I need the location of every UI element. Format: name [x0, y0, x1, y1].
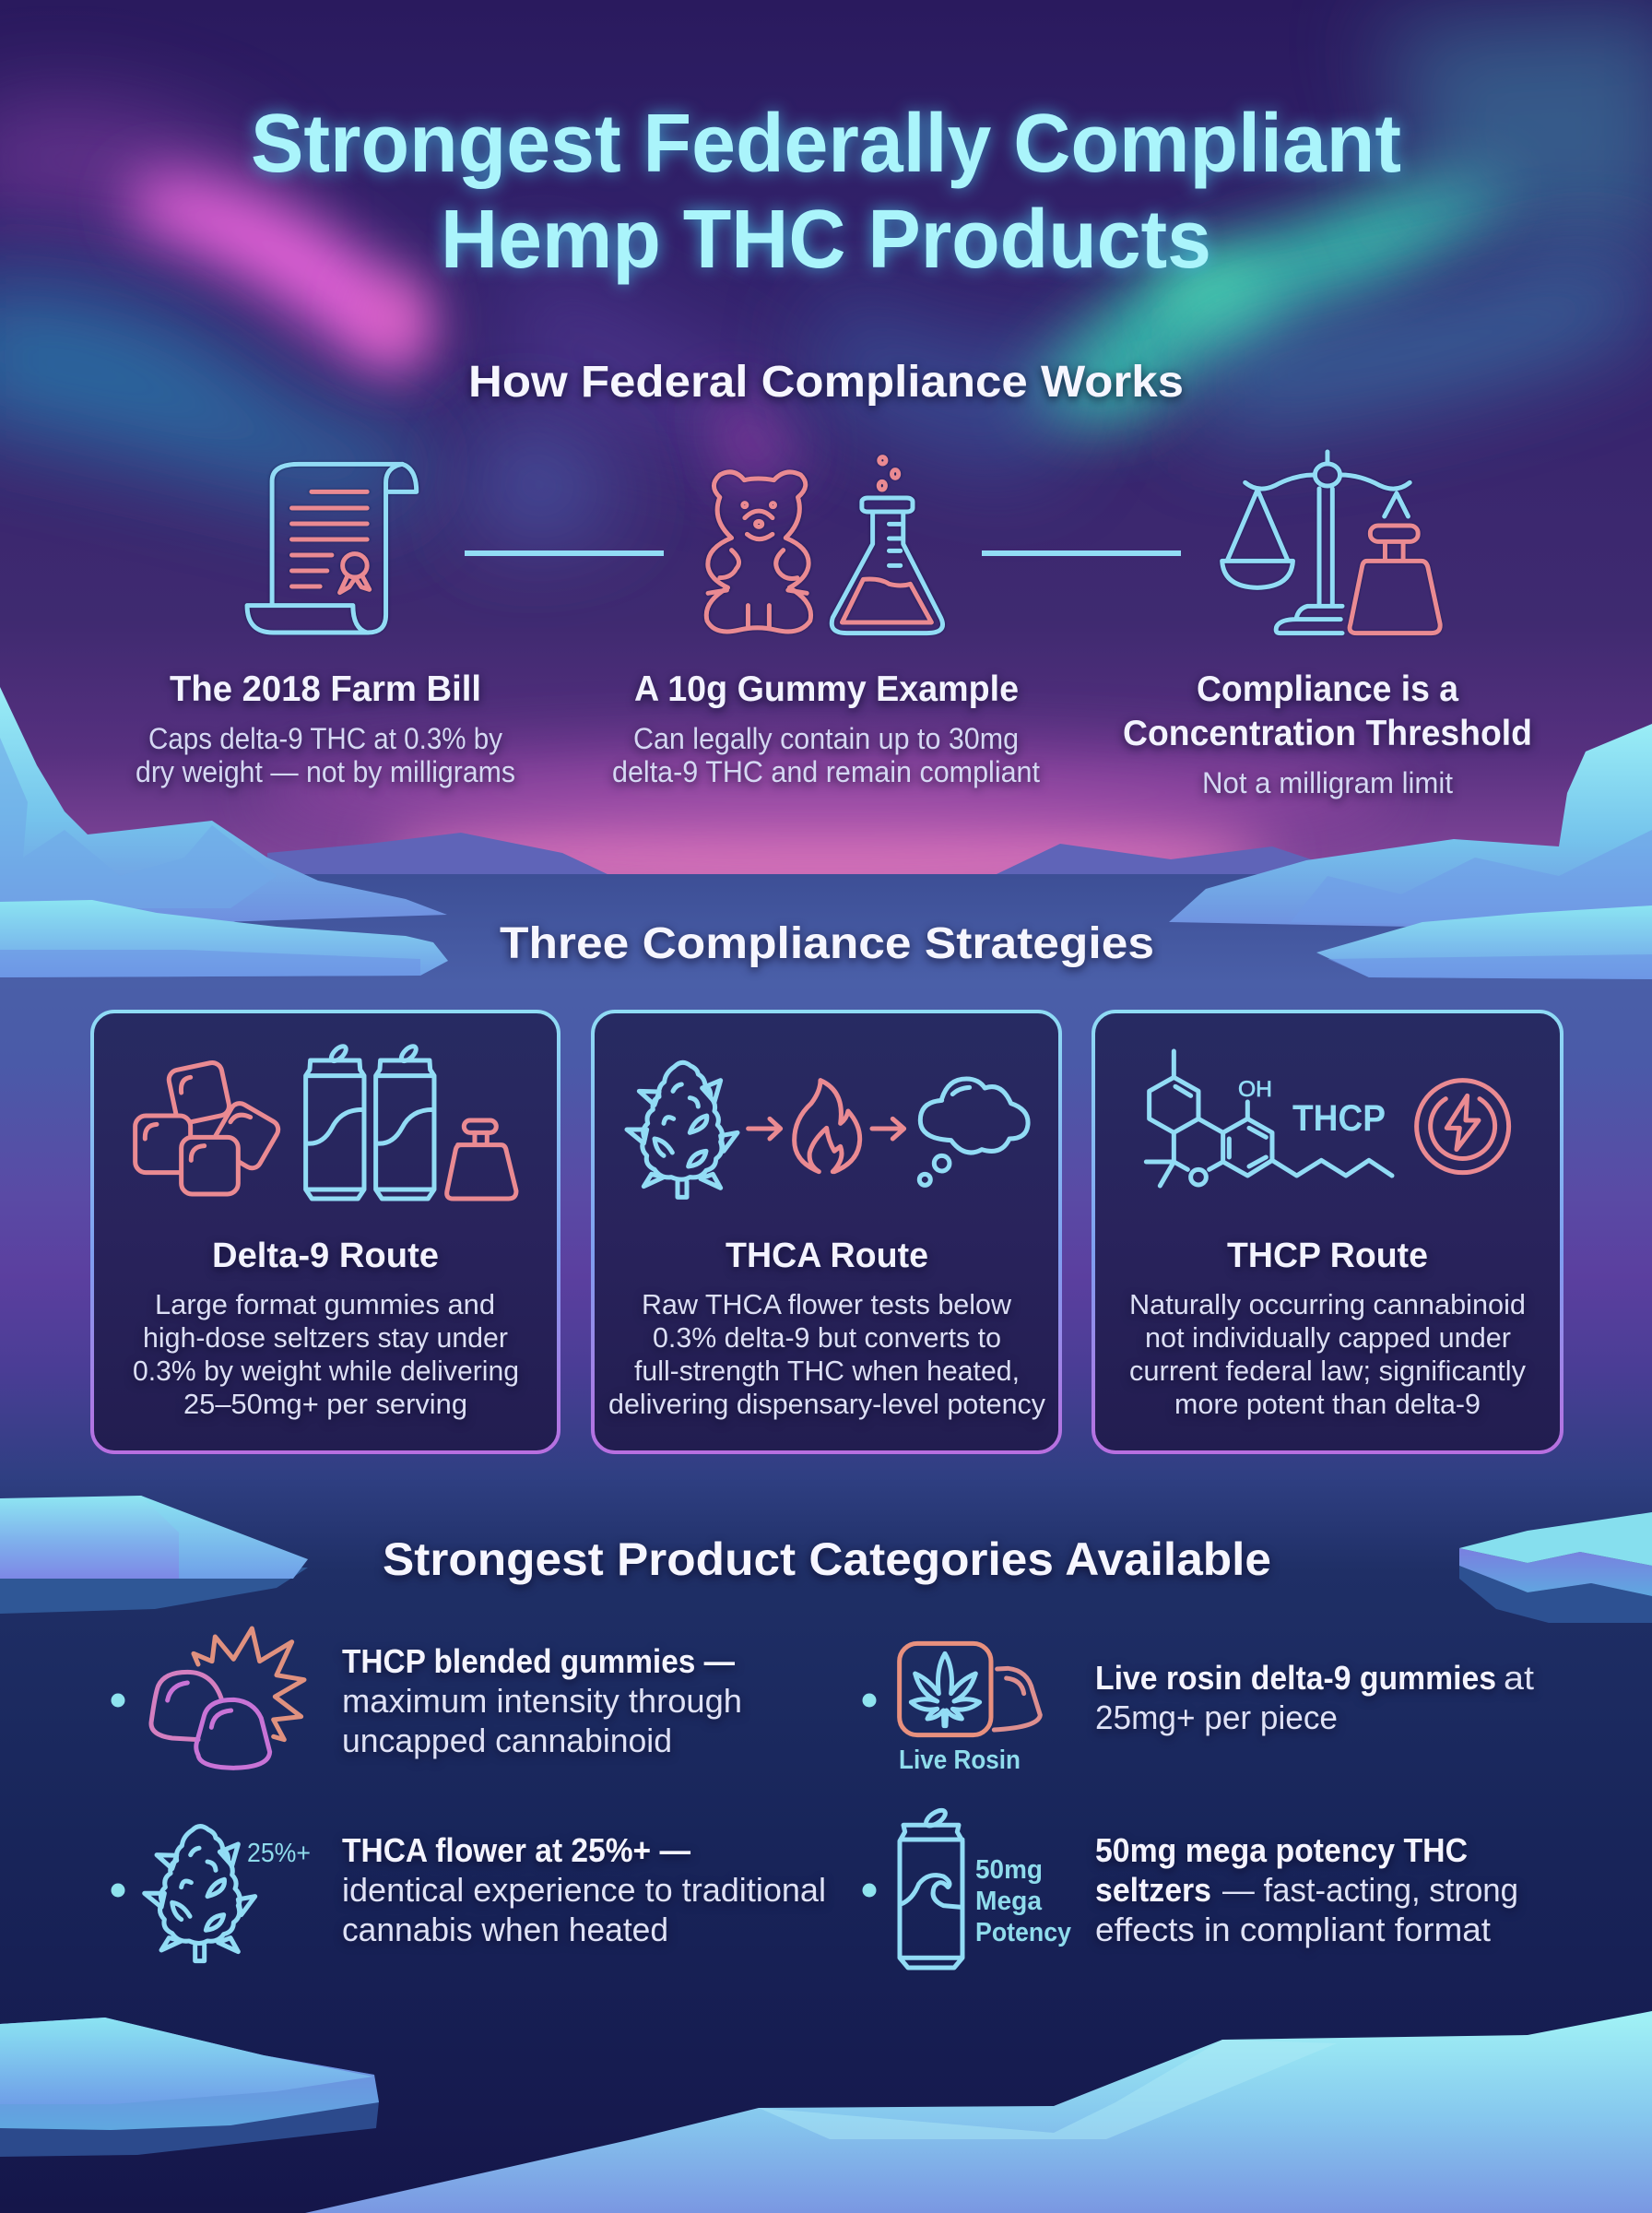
title [251, 98, 1401, 286]
panel: thca route [593, 1012, 1060, 1452]
card text: current federal law; significantly [1129, 1355, 1526, 1387]
card text [1129, 1288, 1526, 1420]
iceberg: middle left [0, 1496, 308, 1614]
card text: high-dose seltzers stay under [143, 1321, 508, 1354]
icon: gummies, cans and weight [136, 1044, 516, 1199]
step: the 2018 farm bill: dry weight — not by milligrams [136, 755, 515, 788]
icon: thcp molecule and energy badge: OH [1238, 1077, 1272, 1102]
item text: effects in compliant format [1095, 1911, 1491, 1948]
item text: cannabis when heated [342, 1911, 668, 1948]
title: Hemp THC Products [441, 194, 1211, 286]
list item: thcp blended gummies [111, 1628, 742, 1768]
card text [133, 1288, 519, 1420]
can tag: Potency [975, 1918, 1071, 1947]
item text [1095, 1659, 1534, 1736]
step: compliance threshold: Concentration Threshold [1123, 714, 1532, 753]
tag: live rosin: Live Rosin [899, 1746, 1021, 1775]
item text: maximum intensity through [342, 1682, 742, 1720]
step: compliance threshold: Not a milligram limit [1202, 766, 1453, 799]
card text: Raw THCA flower tests below [642, 1288, 1012, 1320]
item text: THCA flower at 25%+ — [342, 1831, 690, 1869]
step: a 10g gummy example: A 10g Gummy Example [634, 669, 1019, 709]
item text [342, 1831, 826, 1948]
heading: three compliance strategies: Three Compliance Strategies [500, 919, 1154, 968]
card text: 25–50mg+ per serving [183, 1388, 467, 1420]
potency tag: 25%+ [247, 1839, 311, 1868]
icon: thcp molecule and energy badge [1146, 1051, 1509, 1186]
icon: flower bud [145, 1827, 255, 1961]
ice shelf: lower right [305, 2011, 1652, 2213]
item text: at [1504, 1659, 1534, 1697]
item text: THCP blended gummies — [342, 1642, 735, 1680]
card text [608, 1288, 1045, 1420]
icon: gummies with burst [151, 1628, 304, 1768]
heading: strongest product categories: Strongest Product Categories Available [383, 1533, 1271, 1585]
heading: how federal compliance works: How Federal Compliance Works [468, 358, 1184, 407]
can tag: 50mg [975, 1855, 1043, 1885]
panel: delta-9 route [92, 1012, 559, 1452]
item text [1095, 1831, 1518, 1948]
iceberg: upper left [0, 687, 448, 977]
item text: 50mg mega potency THC [1095, 1831, 1468, 1869]
card heading: Delta-9 Route [212, 1237, 439, 1275]
iceberg: lower left [0, 2018, 379, 2157]
title: Strongest Federally Compliant [251, 98, 1401, 190]
card text: full-strength THC when heated, [634, 1355, 1020, 1387]
step: compliance threshold: Compliance is a [1197, 669, 1458, 709]
step: the 2018 farm bill: Caps delta-9 THC at 0.3% by [148, 722, 502, 755]
list item: thca flower [111, 1827, 826, 1961]
distant mountains [267, 833, 1383, 883]
step: compliance threshold [1123, 669, 1532, 799]
step: a 10g gummy example: Can legally contain up to 30mg [633, 722, 1019, 755]
item text [342, 1642, 742, 1759]
iceberg: upper right [1169, 724, 1652, 979]
icon: bud, flame and cloud [627, 1062, 1028, 1197]
icon: gummy bear and flask [706, 457, 943, 633]
card text: Naturally occurring cannabinoid [1129, 1288, 1526, 1320]
icon: live rosin gummy [900, 1643, 1040, 1735]
card text: delivering dispensary-level potency [608, 1388, 1045, 1420]
aurora lights [0, 9, 1652, 904]
card text: 0.3% delta-9 but converts to [653, 1321, 1001, 1354]
icon: farm bill scroll [247, 464, 417, 633]
card text: 0.3% by weight while delivering [133, 1355, 519, 1387]
iceberg: middle right [1459, 1512, 1652, 1623]
connector line [465, 550, 664, 556]
step: the 2018 farm bill [136, 669, 515, 788]
item text: 25mg+ per piece [1095, 1698, 1338, 1736]
item text: identical experience to traditional [342, 1871, 826, 1909]
list item: mega potency seltzers [863, 1807, 1518, 1968]
step: a 10g gummy example [612, 669, 1040, 788]
connector line [982, 550, 1181, 556]
item text: Live rosin delta-9 gummies [1095, 1659, 1496, 1697]
card text: Large format gummies and [155, 1288, 495, 1320]
step: a 10g gummy example: delta-9 THC and remain compliant [612, 755, 1040, 788]
icon: scale and weight [1222, 452, 1440, 633]
can tag [975, 1855, 1071, 1947]
panel: thcp route [1093, 1012, 1562, 1452]
item text: seltzers [1095, 1871, 1211, 1909]
frozen water [0, 874, 1652, 2213]
card text: more potent than delta-9 [1174, 1388, 1481, 1420]
card text: not individually capped under [1145, 1321, 1511, 1354]
card heading: THCA Route [726, 1237, 928, 1275]
icon: seltzer can [900, 1807, 962, 1968]
item text: uncapped cannabinoid [342, 1722, 672, 1759]
can tag: Mega [975, 1887, 1043, 1916]
step: the 2018 farm bill: The 2018 Farm Bill [170, 669, 481, 709]
icon: thcp molecule and energy badge: THCP [1292, 1098, 1386, 1139]
card heading: THCP Route [1227, 1237, 1428, 1275]
list item: live rosin gummies [863, 1643, 1534, 1775]
background: night sky [0, 0, 1652, 885]
item text: — fast-acting, strong [1222, 1871, 1518, 1909]
